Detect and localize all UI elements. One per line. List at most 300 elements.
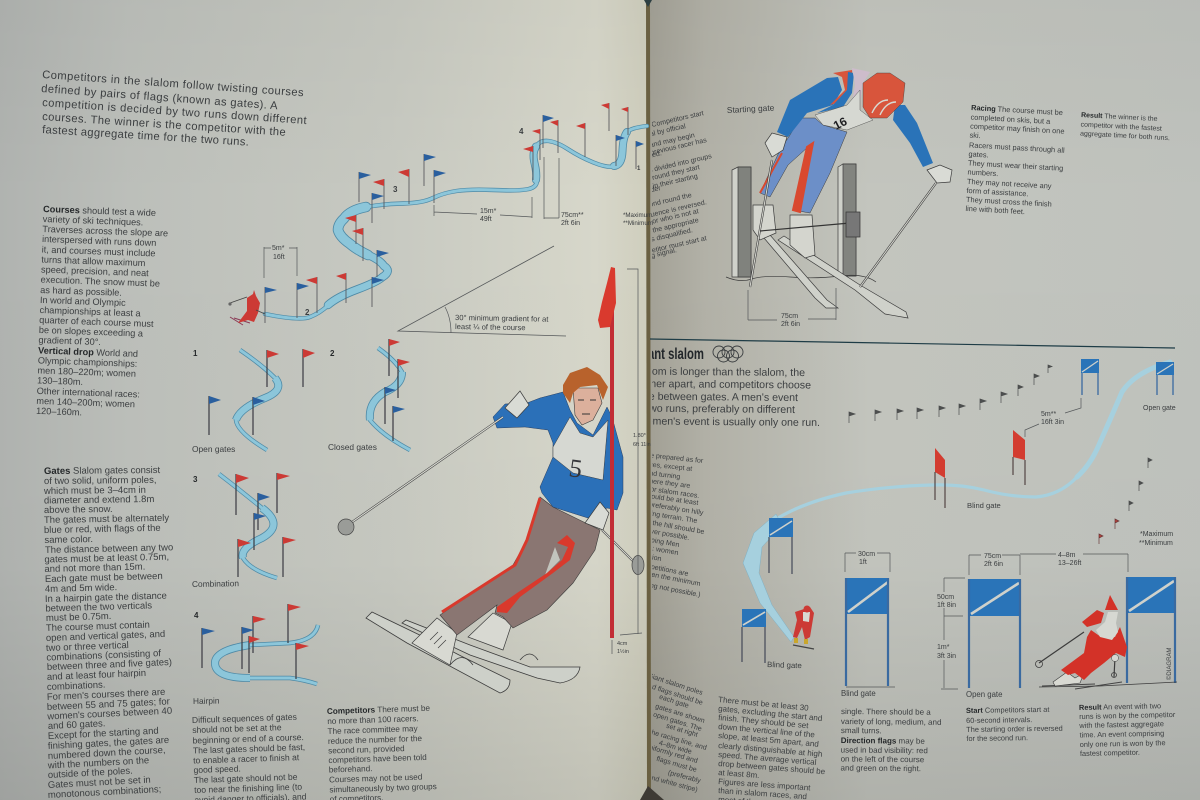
intro text: Competitors in the slalom follow twisting courses (42, 69, 304, 99)
text: giant slalom poles, cut by gutter: each gate (658, 694, 690, 710)
text: gates: The course must contain (46, 620, 150, 634)
text: turns and direction flags: small turns. (841, 726, 882, 735)
body (1061, 627, 1127, 680)
giant slalom course diagram (742, 359, 1176, 670)
text: gates count: finish. They should be set (718, 713, 810, 730)
text: competitors: beforehand. (329, 764, 373, 774)
text: starting gate timing, cut by gutter: Starting Competitors start (626, 110, 704, 135)
text: racing: numbers. (967, 167, 999, 178)
skis (764, 235, 908, 318)
text: giant slalom poles, cut by gutter: (preferably (667, 770, 702, 785)
text: competitors (327, 704, 437, 800)
text: giant slalom course, cut by gutter: any sound turning (625, 467, 681, 481)
text: competitors: Courses may not be used (329, 773, 423, 784)
text: racing: They must cross the finish (966, 195, 1052, 209)
text: gates: For men's courses there are (47, 687, 166, 703)
text: giant slalom intro: their own line between gates. A men's event (592, 390, 798, 404)
dimension: 4-8m (1020, 552, 1128, 572)
blind gate diagram: 30cm (858, 551, 875, 558)
trouser stripes (442, 498, 575, 613)
text: gates count: gates, excluding the start and (718, 704, 823, 723)
small flags right (1099, 458, 1152, 544)
heading: giant slalom: Giant slalom (636, 346, 704, 363)
gate posts (732, 164, 856, 277)
text: difficult sequences: The last gate should not be (194, 772, 298, 785)
bib number: 16 (831, 114, 850, 133)
blue gate low (742, 609, 766, 663)
text: gates: gates must be at least 0.75m, (44, 552, 169, 565)
text: courses and vertical drop: speed, precision, and neat (41, 264, 149, 278)
text: gates count: Figures are less important (718, 777, 812, 793)
text: turns and direction flags (840, 707, 942, 773)
course ribbon (778, 362, 1170, 518)
open gate diagram (937, 553, 1020, 699)
footnote: maximum and minimum: *Maximum (1140, 531, 1173, 538)
text: gates count: slope, at least 5m apart, and (718, 731, 819, 749)
ribbon turn (743, 514, 794, 642)
text: starting gate timing, cut by gutter: starting sequence is reversed. (615, 199, 707, 227)
text: gates: Each gate must be between (45, 571, 163, 585)
text: giant slalom poles, cut by gutter: uniformly red and (644, 743, 698, 765)
text: difficult sequences: Difficult sequences of gates (192, 712, 297, 725)
text: gates: above the snow. (44, 504, 113, 516)
text: giant slalom course, cut by gutter: Courses are prepared as for (616, 449, 704, 465)
gloves (505, 391, 609, 530)
intro text: defined by pairs of flags (known as gates). A (41, 83, 279, 112)
intro text: courses. The winner is the competitor with the (42, 111, 286, 139)
text: start: for the second run. (966, 733, 1028, 743)
gradient diagram: 30° minimum gradient for at (455, 313, 549, 324)
text: starting gate timing, cut by gutter: the starting signal. (621, 247, 678, 267)
text: racing: ski. (969, 130, 981, 140)
text: giant slalom course, cut by gutter: drop must have been the minimum (594, 561, 701, 588)
course gate numbers: 3 (393, 185, 398, 194)
text: starting gate timing, cut by gutter: Racers divided into groups (630, 153, 713, 179)
text: courses and vertical drop: Vertical drop World and (38, 345, 138, 359)
text: gates: which must be 3–4cm in (43, 485, 146, 497)
text: competitors: The race committee may (327, 724, 419, 736)
text: starting gate timing, cut by gutter: at the appropriate (644, 217, 700, 236)
course gate numbers: 2 (305, 308, 310, 317)
text: courses and vertical drop: In world and Olympic (40, 295, 126, 308)
text: difficult sequences: too near the finishing line (to (194, 782, 302, 795)
ski boots (412, 613, 512, 665)
dimension: 4-8m: 13–26ft (1058, 560, 1081, 567)
text: gates: two or three vertical (46, 640, 129, 654)
gradient diagram: least ¼ of the course (455, 322, 526, 332)
text: starting gate timing, cut by gutter: second round the (638, 192, 693, 211)
text: gates: of two solid, uniform poles, (44, 475, 157, 487)
left arm (777, 77, 842, 137)
text: gates: outside of the poles. (48, 766, 133, 781)
text: giant slalom poles, cut by gutter: and flags should be (644, 681, 704, 707)
text: gates: Gates Slalom gates consist (44, 465, 161, 477)
text: giant slalom course, cut by gutter: not suited up for slalom races. (606, 480, 700, 500)
text: gates count: There must be at least 30 (718, 695, 810, 713)
blue shoulder strip (817, 72, 854, 113)
open gate diagram: 50cm (937, 594, 954, 601)
text: difficult sequences (192, 711, 307, 800)
illustration: slalom skier with gate flag (338, 267, 651, 693)
dimension: 5m (1025, 398, 1081, 437)
text: courses and vertical drop: it, and courses must include (42, 244, 156, 258)
text: courses and vertical drop: quarter of each course must (39, 315, 154, 329)
text: giant slalom course, cut by gutter: 30m wide, preferably on hilly (615, 496, 704, 517)
text: giant slalom intro: gates are farther apart, and competitors choose (588, 378, 811, 392)
poles (750, 160, 936, 287)
text: giant slalom poles, cut by gutter: flags must be (655, 756, 697, 774)
text: starting gate timing, cut by gutter: A competitor must start at (629, 235, 707, 260)
dimension: 15m: 15m* (480, 208, 497, 215)
text: gates count: speed. The average vertical (718, 750, 817, 767)
text: competitors: Competitors There must be (327, 704, 431, 716)
text: racing: competitor may finish on one (970, 121, 1065, 136)
text: courses and vertical drop: 130–180m. (37, 375, 83, 387)
text: giant slalom course, cut by gutter: competition (625, 550, 662, 563)
footnote: maximum and minimum: *Maximum (623, 212, 652, 219)
text: racing: gates. (968, 149, 989, 160)
text: courses and vertical drop: gradient of 30°. (38, 335, 101, 347)
text: result for giant slalom: fastest competitor. (1080, 748, 1140, 758)
gate type 4: hairpin: 4 (194, 611, 199, 620)
gate type 1: open gates: 1 (193, 349, 198, 358)
text: result for giant slalom (1078, 701, 1177, 758)
text: start: 60-second intervals. (966, 715, 1032, 725)
text: start (966, 705, 1063, 743)
text: difficult sequences: should not be set at the (192, 722, 282, 735)
blind gate diagram (841, 551, 895, 698)
gap between legs (545, 547, 560, 575)
text: giant slalom course, cut by gutter: whenever possible. (629, 524, 690, 542)
text: giant slalom course, cut by gutter: vertical height of the hill should be (600, 511, 705, 536)
text: competitors: competitors have been told (328, 753, 427, 765)
dimension: 75cm: 2ft 6in (781, 321, 800, 328)
text: result for giant slalom: runs is won by the competitor (1079, 710, 1176, 721)
ground line (1039, 682, 1177, 687)
text: giant slalom poles, cut by gutter: Giant slalom poles (647, 672, 704, 697)
text: gates: numbered down the course, (48, 745, 166, 762)
gate type 1: open gates: Open gates (192, 444, 235, 454)
race bib (553, 417, 608, 480)
course flags (265, 103, 644, 323)
glove (1112, 654, 1118, 662)
text: result: aggregate time for both runs. (1080, 130, 1170, 142)
book gutter (640, 0, 664, 800)
text: starting gate timing, cut by gutter: order (644, 185, 662, 196)
text: result for giant slalom: time. An event comprising (1079, 729, 1164, 739)
dimension: 4-8m: 4–8m (1058, 552, 1076, 559)
dimension: gate height: 4cm (617, 641, 628, 647)
red gate flag (598, 267, 616, 328)
small flags top (849, 365, 1052, 423)
red gate upper (1013, 430, 1025, 485)
dimension: 75cm (748, 288, 836, 328)
text: giant slalom intro: courses; a women's event is usually only one run. (587, 415, 820, 429)
gate type 3: combination: 3 (193, 475, 198, 484)
boots (1053, 672, 1084, 686)
text: result for giant slalom: only one run is won by the (1080, 738, 1166, 749)
intro text: fastest aggregate time for the two runs. (42, 124, 249, 149)
text: giant slalom intro: The giant slalom is longer than the slalom, the (589, 365, 805, 379)
text: giant slalom course, cut by gutter (652, 454, 704, 598)
text: gates: open and vertical gates, and (46, 629, 165, 644)
label: open gate: Open gate (1143, 405, 1176, 412)
dimension: gate height (612, 269, 651, 655)
text: starting gate timing, cut by gutter (652, 110, 712, 259)
bib number: 5 (567, 453, 584, 484)
text: racing: line with both feet. (965, 204, 1025, 216)
illustration: giant slalom skier (1036, 595, 1177, 689)
text: gates: combinations. (47, 680, 106, 693)
open gate diagram: 1ft 8in (937, 602, 956, 609)
text: courses and vertical drop: Olympic championships: (38, 355, 138, 369)
dimension: 75cm: 2ft 6in (561, 220, 580, 227)
red gate pole (610, 303, 614, 638)
hat (1105, 595, 1118, 610)
text: courses and vertical drop: execution. The snow must be (40, 274, 160, 289)
text: competitors: reduce the number for the (328, 734, 423, 746)
gate type 3: combination: Combination (192, 578, 239, 589)
text: turns and direction flags: on the left of the course (841, 754, 925, 764)
blind gate diagram: 1ft (859, 559, 867, 566)
text: gates: diameter and extend 1.8m (44, 494, 154, 506)
text: turns and direction flags: and green on the right. (840, 763, 921, 773)
text: gates (43, 465, 173, 800)
text: giant slalom poles, cut by gutter: the racing line, and (649, 729, 707, 752)
text: gates: between three and five gates) (47, 657, 172, 673)
text: racing (965, 103, 1067, 218)
text: gates: same color. (44, 534, 93, 546)
text: gates: The distance between any two (45, 542, 173, 556)
text: gates count (718, 695, 826, 800)
text: giant slalom poles, cut by gutter (652, 674, 707, 793)
text: gates: and not more than 15m. (44, 562, 145, 575)
open gate diagram: Open gate (966, 690, 1002, 699)
text: gates: must be 0.75m. (46, 611, 112, 624)
dimension: gate height: 1½in (617, 648, 629, 655)
gate type 3: combination (192, 473, 296, 589)
dimension: 15m: 49ft (480, 216, 492, 223)
text: racing: Racing The course must be (971, 103, 1063, 117)
dimension: gate height: 1.80* (633, 433, 647, 439)
text: gates count: clearly distinguishable at high (718, 741, 823, 759)
text: courses and vertical drop: turns that allow maximum (41, 254, 146, 268)
label: starting gate: Starting gate (727, 103, 775, 115)
arm (1082, 610, 1104, 627)
text: giant slalom course, cut by gutter: competition: women (616, 539, 679, 557)
ski pole (1036, 632, 1116, 678)
text: result: competitor with the fastest (1080, 121, 1162, 133)
open gate diagram: 1m* (937, 644, 950, 651)
helmet straps (872, 100, 896, 115)
text: gates: with the numbers on the (47, 755, 149, 772)
text: turns and direction flags: single. There should be a (841, 707, 931, 717)
open gate diagram: 3ft 3in (937, 653, 956, 660)
text: racing: Racers must pass through all (969, 140, 1065, 155)
dimension: 15m (434, 197, 532, 223)
footnote: maximum and minimum (623, 212, 653, 227)
text: courses and vertical drop (36, 204, 169, 420)
text: starting gate timing, cut by gutter: signal by official (637, 123, 687, 141)
text: giant slalom poles, cut by gutter: and white stripe) (647, 774, 698, 794)
second open gate (1127, 577, 1175, 683)
divider rule (650, 339, 1175, 348)
text: racing: They must wear their starting (968, 158, 1063, 173)
skis (1042, 682, 1122, 689)
text: turns and direction flags: Direction flags may be (841, 736, 925, 746)
text: giant slalom poles, cut by gutter: gates are shown (654, 703, 706, 725)
gradient diagram (398, 246, 566, 336)
slalom course diagram (228, 103, 653, 325)
left page (0, 0, 648, 800)
text: gates: and at least four hairpin (47, 668, 146, 683)
text: gates: and 60 gates. (48, 718, 106, 732)
text: courses and vertical drop: interspersed with runs down (42, 234, 157, 248)
course gate numbers (305, 127, 641, 317)
snow (726, 275, 876, 282)
gloves (765, 133, 952, 183)
intro text (41, 69, 308, 149)
text: giant slalom course, cut by gutter: In some competitions are (611, 556, 689, 578)
gate type 4: hairpin: Hairpin (193, 696, 220, 706)
text: gates: between the two verticals (45, 600, 152, 614)
footnote: maximum and minimum: **Minimum (623, 220, 653, 227)
text: starting gate timing, cut by gutter: and may begin (649, 132, 696, 149)
label: blind gate: Blind gate (767, 660, 802, 670)
text: gates: In a hairpin gate the distance (45, 591, 167, 605)
text: starting gate timing, cut by gutter: competitor who is not at (626, 208, 699, 232)
text: starting gate timing, cut by gutter: the previous racer has (638, 137, 708, 160)
gate type 2: closed gates (328, 339, 410, 452)
text: courses and vertical drop: Traverses across the slope are (42, 224, 168, 238)
text: racing: They may not receive any (967, 177, 1052, 191)
gate type 2: closed gates: Closed gates (328, 442, 377, 452)
text: giant slalom poles, cut by gutter: 4–8m wide (658, 740, 692, 756)
text: gates: The gates must be alternately (44, 513, 169, 526)
text: courses and vertical drop: championships at least a (39, 305, 142, 318)
trousers (760, 118, 847, 213)
blind gate diagram: Blind gate (841, 689, 876, 698)
text: start: The starting order is reversed (966, 724, 1063, 734)
text: turns and direction flags: variety of long, medium, and (841, 717, 941, 727)
timing wand (760, 212, 860, 237)
dimension: 75cm: 75cm (781, 313, 798, 320)
dimension: 5m: 5m** (1041, 411, 1056, 418)
text: giant slalom course, cut by gutter: vertical dropping not possible.) (606, 574, 701, 599)
text: competitors: second run, provided (328, 744, 405, 755)
text: giant slalom poles, cut by gutter: as open gates. The (643, 709, 703, 733)
text: difficult sequences: beginning or end of a course. (192, 732, 304, 745)
dimension: gate height: 6ft 11in (633, 442, 651, 448)
text: giant slalom course, cut by gutter: areas where they are (624, 475, 691, 490)
text: result (1080, 112, 1171, 142)
dimension: 5m: 16ft 3in (1041, 419, 1064, 426)
text: courses and vertical drop: Other international races: (37, 386, 140, 399)
right arm (893, 105, 933, 167)
text: courses and vertical drop: be on slopes exceeding a (39, 325, 144, 339)
text: gates: combinations (consisting of (46, 648, 161, 663)
text: starting gate timing, cut by gutter: started. (638, 150, 662, 162)
icon: olympic rings (713, 346, 743, 362)
back panel (830, 70, 853, 105)
helmet (863, 73, 905, 118)
text: result: Result The winner is the (1081, 112, 1158, 123)
red gate lower (935, 448, 945, 508)
text: racing: completed on skis, but a (970, 112, 1051, 126)
text: courses and vertical drop: men 180–220m; women (37, 365, 136, 379)
text: giant slalom course, cut by gutter: and undulating terrain. The (614, 505, 698, 525)
footnote: maximum and minimum: **Minimum (1139, 540, 1173, 547)
skis (366, 612, 580, 693)
text: giant slalom course, cut by gutter: vertical dropping Men (613, 530, 680, 549)
face and chest (1096, 612, 1118, 640)
course ribbon (265, 126, 647, 318)
text: courses and vertical drop: men 140–200m; women (36, 396, 135, 409)
open gate flags top (1081, 359, 1174, 395)
footnote: maximum and minimum (1139, 531, 1173, 547)
ski poles (338, 417, 644, 574)
text: gates: Gates must not be set in (48, 775, 151, 791)
text: gates: Except for the starting and (48, 726, 159, 742)
head (563, 367, 608, 425)
trouser stripes (760, 143, 813, 212)
trousers (440, 497, 600, 635)
text: courses and vertical drop: as hard as possible. (40, 285, 122, 298)
open gate diagram: 75cm (984, 553, 1001, 560)
text: starting gate timing, cut by gutter: seeding in their starting (626, 173, 699, 196)
small giant slalom skier (793, 606, 814, 649)
text: courses and vertical drop: variety of ski techniques. (43, 214, 143, 228)
text: result for giant slalom: with the fastest aggregate (1078, 719, 1164, 730)
course gate numbers: 4 (519, 127, 524, 136)
text: gates: finishing gates, the gates are (48, 735, 169, 752)
text: gates: 4m and 5m wide. (45, 582, 117, 595)
gate type 1: open gates (192, 349, 315, 454)
small skier on course (228, 290, 265, 325)
text: result for giant slalom: Result An event with two (1079, 701, 1161, 712)
gate type 2: closed gates: 2 (330, 349, 335, 358)
blue gate on turn (769, 518, 793, 574)
dimension: 75cm: 75cm** (561, 212, 584, 219)
text: gates count: at least 8m. (718, 768, 760, 780)
text: gates count: drop between gates should be (718, 759, 826, 776)
text: competitors: no more than 100 racers. (327, 714, 419, 726)
text: courses and vertical drop: 120–160m. (36, 406, 82, 417)
text: turns and direction flags: used in bad visibility: red (841, 745, 928, 755)
dimension: 5m: 5m* (272, 245, 285, 252)
white bib (815, 90, 873, 130)
text: giant slalom intro (652, 367, 819, 428)
text: gates count: down the vertical line of the (718, 722, 816, 739)
text: starting gate timing, cut by gutter: round they start (651, 164, 701, 182)
text: difficult sequences: to enable a racer to finish at (193, 752, 300, 765)
gate type 4: hairpin (193, 604, 318, 706)
text: giant slalom poles, cut by gutter: set at right (665, 723, 699, 739)
dimension: 5m: 16ft (273, 254, 285, 261)
text: gates: blue or red, with flags of the (44, 523, 161, 536)
text: difficult sequences: The last gates should be fast, (193, 742, 305, 755)
text: giant slalom course, cut by gutter: slalom races, except at (621, 459, 693, 473)
text: starting gate timing, cut by gutter: time is disqualified. (634, 227, 694, 247)
text: gates: between 55 and 75 gates; for (47, 696, 170, 713)
text: giant slalom course, cut by gutter: The course should be at least (607, 487, 699, 507)
collar (850, 68, 870, 115)
text: racing: form of assistance. (966, 186, 1029, 198)
dimension: 5m (264, 245, 297, 278)
text: competitors: simultaneously by two groups (329, 782, 437, 794)
text: difficult sequences: good speed. (193, 763, 241, 775)
course gate numbers: 1 (637, 166, 641, 172)
